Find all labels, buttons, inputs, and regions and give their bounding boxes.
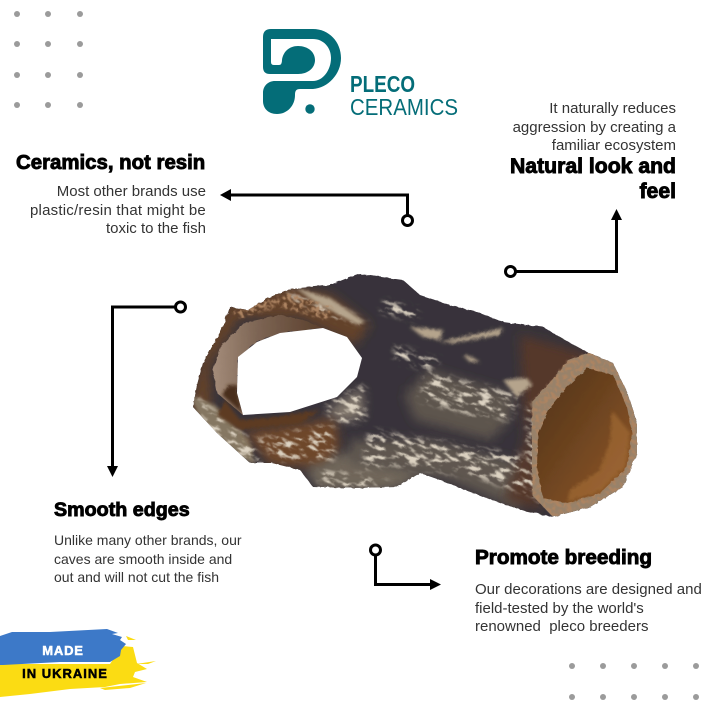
heading: Natural look and feel xyxy=(510,155,676,203)
brush stroke: blue xyxy=(0,629,126,665)
logo wordmark xyxy=(350,71,458,120)
heading: Natural look and feel: Natural look and xyxy=(510,155,676,178)
arrow: smooth edges xyxy=(107,302,186,477)
text: ceramics description: plastic/resin that might be xyxy=(30,202,206,218)
cream speckled bark xyxy=(196,289,540,504)
text: smooth edges description: caves are smooth inside and xyxy=(54,550,232,566)
heading: Promote breeding: Promote breeding xyxy=(475,546,652,569)
arrow: ceramics xyxy=(220,189,412,226)
arrow: promote breeding xyxy=(370,545,441,590)
rusty bark patch xyxy=(232,293,335,320)
text: promote breeding description: renowned pleco breeders xyxy=(475,618,648,635)
badge text: MADE xyxy=(42,643,84,658)
text: natural look description: aggression by creating a xyxy=(513,118,676,136)
text: promote breeding description: field-tested by the world's xyxy=(475,600,644,616)
text: ceramics description: Most other brands use xyxy=(57,183,206,200)
left inner wall xyxy=(213,315,323,415)
heading: Natural look and feel: feel xyxy=(639,180,676,203)
arrow: natural look xyxy=(506,209,622,276)
badge: Made in Ukraine xyxy=(0,629,156,697)
heading: Smooth edges: Smooth edges xyxy=(54,499,190,521)
text: natural look description: It naturally reduces xyxy=(549,100,676,117)
badge text: IN UKRAINE xyxy=(22,666,108,681)
text: promote breeding description xyxy=(475,581,702,635)
product: ceramic log cave xyxy=(193,274,638,517)
log body xyxy=(193,274,638,517)
badge text xyxy=(22,643,108,681)
brush stroke: yellow xyxy=(0,646,147,697)
decorative dot grid, bottom right xyxy=(569,663,699,700)
text: promote breeding description: Our decorations are designed and xyxy=(475,581,702,598)
icon: P mark xyxy=(263,29,341,114)
logo wordmark: PLECO xyxy=(350,71,415,97)
text: smooth edges description: Unlike many other brands, our xyxy=(54,532,242,548)
text: ceramics description xyxy=(30,183,206,237)
text: smooth edges description: out and will not cut the fish xyxy=(54,569,219,585)
text: smooth edges description xyxy=(54,532,242,585)
decorative dot grid, top left xyxy=(14,11,83,108)
bark plates xyxy=(295,288,547,413)
text: natural look description: familiar ecosystem xyxy=(552,137,676,154)
text: natural look description xyxy=(513,100,676,154)
heading: Ceramics, not resin: Ceramics, not resin xyxy=(16,152,205,174)
text: ceramics description: toxic to the fish xyxy=(106,220,206,237)
cave opening rim xyxy=(532,352,637,517)
log hole xyxy=(237,328,362,415)
brush streaks xyxy=(100,636,156,690)
logo: Pleco Ceramics xyxy=(263,29,458,120)
cave interior xyxy=(537,368,632,503)
